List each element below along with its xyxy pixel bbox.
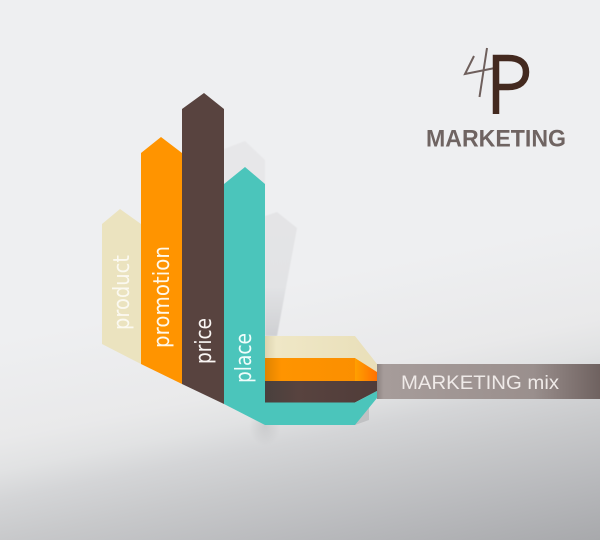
label: price: price <box>192 318 217 364</box>
bar: marketing mix <box>377 364 600 399</box>
shadows of the arrows <box>224 141 369 446</box>
arrow: promotion <box>141 137 182 384</box>
arrow: price <box>182 93 224 404</box>
chart: four arrows <box>102 93 265 425</box>
logo: 4P <box>465 48 526 114</box>
ribbons <box>265 336 377 425</box>
ribbon: teal <box>265 391 377 425</box>
title: MARKETING: MARKETING <box>426 126 566 152</box>
label: promotion: promotion <box>150 246 175 348</box>
label: marketing mix: MARKETING mix <box>401 372 559 394</box>
ribbon: brown <box>265 381 377 402</box>
arrow: product <box>102 209 141 364</box>
arrow: place <box>224 167 265 425</box>
icon: thin number 4 <box>465 48 495 97</box>
label: product: product <box>110 255 135 330</box>
icon: letter P <box>496 58 526 114</box>
ribbon: cream <box>265 336 377 372</box>
ribbon: orange <box>265 358 377 381</box>
label: place: place <box>232 333 257 383</box>
